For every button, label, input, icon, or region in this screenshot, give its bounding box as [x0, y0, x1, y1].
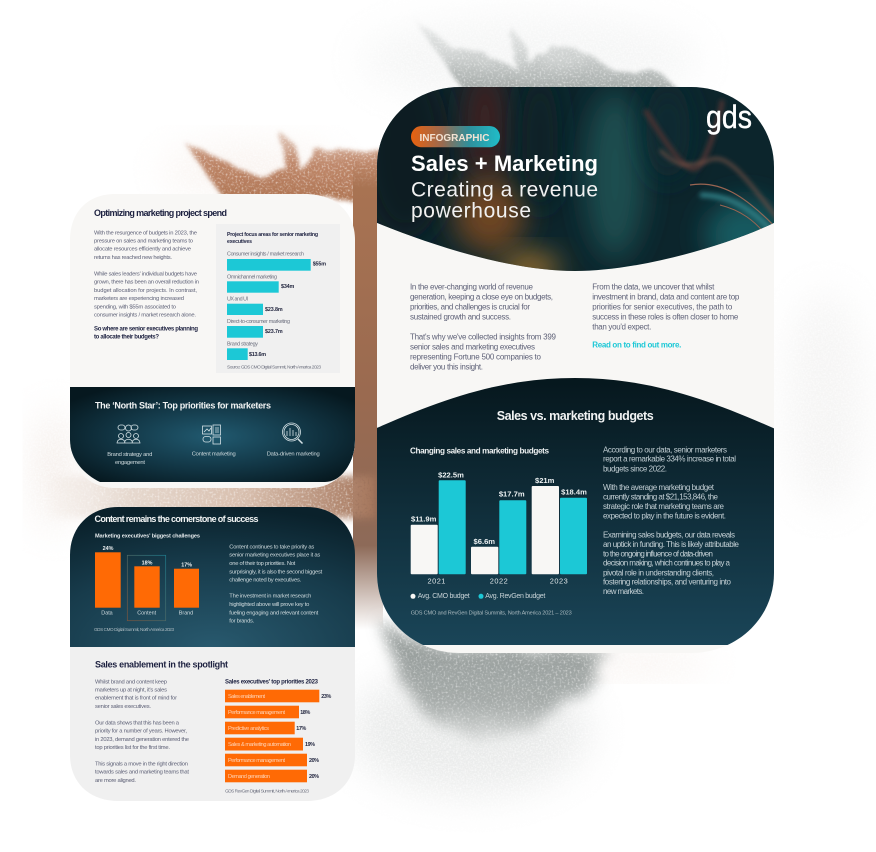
- bar chart: project focus areas: Omnichannel marketing: [227, 274, 277, 280]
- bar chart: sales executives top priorities: [225, 679, 332, 794]
- chart title: Changing sales and marketing budgets: [410, 447, 549, 456]
- text block: one of their top priorities. Not: [229, 561, 296, 567]
- bar chart: sales executives top priorities: Predictive analytics: [228, 726, 269, 732]
- text block: intro left column: sustained growth and success.: [410, 313, 511, 322]
- text block: budgets analysis: pivotal role in understanding clients,: [603, 568, 714, 577]
- bars 2022: $6.6m: [474, 537, 495, 546]
- icon labels: [107, 452, 320, 466]
- bar chart: sales executives top priorities: 18%: [300, 710, 311, 716]
- text block: consumer insights / market research alone.: [94, 312, 196, 318]
- bar chart: changing sales and marketing budgets: [410, 447, 587, 616]
- bars 2023: $21m: [535, 476, 555, 485]
- text block: intro left column: In the ever-changing world of revenue: [410, 283, 534, 292]
- text block: are more aligned.: [95, 778, 136, 784]
- heading: Sales enablement in the spotlight: [95, 659, 228, 669]
- text block: intro right column: investment in brand, data and content are top: [592, 293, 740, 302]
- bar chart: sales executives top priorities: Sales enablement: [228, 694, 265, 700]
- bar chart: sales executives top priorities: Performance management: [228, 758, 285, 764]
- heading: The ‘North Star’: Top priorities for marketers: [95, 401, 271, 411]
- text block: While sales leaders' individual budgets have: [94, 271, 197, 277]
- legend: [410, 593, 545, 600]
- panel: content remains the cornerstone: [70, 507, 355, 647]
- bar chart: project focus areas: [216, 224, 340, 373]
- text block: priority for a number of years. However,: [95, 729, 187, 735]
- heading: Content remains the cornerstone of success: [94, 514, 258, 524]
- bars 2021: [411, 470, 466, 586]
- text block: intro right column: priorities for senior executives, the path to: [592, 303, 733, 312]
- text block: intro right column: [592, 283, 740, 349]
- text block: So where are senior executives planning: [94, 327, 198, 333]
- bar chart: project focus areas: $23.8m: [265, 307, 283, 313]
- title: powerhouse: [411, 199, 531, 222]
- text block: challenge noted by executives.: [229, 577, 302, 583]
- text block: budgets analysis: currently standing at $21,153,846, the: [603, 492, 719, 501]
- bar chart: sales executives top priorities: 20%: [309, 758, 319, 764]
- text block: Our data shows that this has been a: [95, 720, 180, 726]
- text block: budgets analysis: budgets since 2022.: [603, 464, 667, 473]
- bar chart: sales executives top priorities: 23%: [321, 694, 332, 700]
- text block: spending, with $55m associated to: [94, 304, 176, 310]
- icon labels: Brand strategy and: [107, 452, 152, 458]
- text block: The investment in market research: [229, 594, 311, 600]
- text block: intro left column: [410, 283, 557, 372]
- bars 2022: 2022: [490, 577, 508, 586]
- bar chart: project focus areas: Brand strategy: [227, 342, 258, 348]
- bar chart: project focus areas: $55m: [313, 262, 326, 268]
- heading: Optimizing marketing project spend: [94, 208, 227, 218]
- text block: highlighted above will prove key to: [229, 602, 309, 608]
- text block: budgets analysis: an uptick in funding. This is likely attributable: [603, 540, 740, 549]
- panel: optimizing marketing project spend: [70, 194, 355, 488]
- icon: content marketing panels: [202, 425, 220, 444]
- text block: budgets analysis: According to our data, senior marketers: [603, 445, 727, 454]
- bar chart: sales executives top priorities: Demand generation: [228, 774, 270, 780]
- text block: intro right column: success in these roles is often closer to home: [592, 313, 739, 322]
- text block: budgets analysis: With the average marketing budget: [603, 483, 715, 492]
- bar chart: biggest challenges: 18%: [142, 560, 153, 566]
- bar chart: biggest challenges: Marketing executives' biggest challenges: [95, 534, 200, 540]
- pill label: infographic: INFOGRAPHIC: [420, 133, 490, 144]
- logo: gds: gds: [706, 99, 752, 135]
- bar chart: project focus areas: Source: GDS CMO Digital Summit, North America 2023: [227, 364, 321, 370]
- pill label: infographic: [411, 126, 500, 147]
- text block: intro right column: than you'd expect.: [592, 323, 651, 332]
- bars 2023: 2023: [550, 577, 568, 586]
- source note: GDS CMO and RevGen Digital Summits, North America 2021 – 2023: [411, 610, 572, 616]
- hero background image: [360, 60, 785, 645]
- bar chart: biggest challenges: 24%: [103, 546, 114, 552]
- text block: Whilst brand and content keep: [95, 679, 167, 685]
- text block: fueling engaging and relevant content: [229, 610, 319, 616]
- text block: surprisingly, it is also the second biggest: [229, 569, 323, 575]
- text block: for brands.: [229, 618, 255, 624]
- heading: sales vs marketing budgets: Sales vs. marketing budgets: [497, 409, 654, 423]
- text block: This signals a move in the right direction: [95, 762, 188, 768]
- text block: budgets analysis: expected to play in the future is evident.: [603, 511, 726, 520]
- bar chart: biggest challenges: Data: [101, 610, 113, 616]
- icon: people with speech bubbles: [117, 425, 140, 443]
- text block: budget allocation for projects. In contrast,: [94, 288, 197, 294]
- bars 2022: $17.7m: [499, 490, 525, 499]
- icon labels: engagement: [115, 460, 145, 466]
- bar chart: sales executives top priorities: GDS RevGen Digital Summit, North America 2023: [225, 789, 309, 794]
- title: [411, 151, 598, 222]
- text block: marketers up at night, it's sales: [95, 688, 167, 694]
- bar chart: project focus areas: Direct-to-consumer marketing: [227, 319, 290, 325]
- bar chart: sales executives top priorities: Performance management: [228, 710, 285, 716]
- icon: magnifier with chart: [282, 423, 302, 444]
- icon labels: Data-driven marketing: [267, 452, 320, 458]
- text block: enablement that is front of mind for: [95, 696, 177, 702]
- bars 2021: $11.9m: [411, 514, 437, 523]
- legend: Avg. RevGen budget: [485, 593, 545, 600]
- text block: intro right column: Read on to find out more.: [592, 340, 681, 349]
- text block: With the resurgence of budgets in 2023, the: [94, 230, 197, 236]
- text block: marketers are experiencing increased: [94, 296, 184, 302]
- text block: allocate resources efficiently and achieve: [94, 247, 191, 253]
- bar chart: project focus areas: $13.6m: [249, 352, 266, 358]
- text block: Content continues to take priority as: [229, 544, 314, 550]
- text block: intro left column: That's why we've collected insights from 399: [410, 333, 557, 342]
- text block: intro left column: generation, keeping a close eye on budgets,: [410, 293, 553, 302]
- bar chart: biggest challenges: Brand: [179, 610, 193, 616]
- bar chart: project focus areas: Project focus areas for senior marketing: [227, 232, 318, 238]
- text block: budgets analysis: report a remarkable 334% increase in total: [603, 455, 736, 464]
- bar chart: sales executives top priorities: 19%: [305, 742, 315, 748]
- bar chart: sales executives top priorities: Sales & marketing automation: [228, 742, 291, 748]
- bars 2022: [471, 490, 526, 586]
- panel: main infographic card: [377, 87, 774, 653]
- text block: returns has reached new heights.: [94, 255, 172, 261]
- title: Creating a revenue: [411, 179, 598, 202]
- text block: intro left column: senior sales and marketing executives: [410, 342, 535, 352]
- text block: to allocate their budgets?: [94, 335, 159, 341]
- bar chart: project focus areas: UX and UI: [227, 297, 248, 303]
- text block: senior marketing executives place it as: [229, 553, 320, 559]
- bars 2021: 2021: [427, 577, 446, 586]
- bar chart: sales executives top priorities: 20%: [309, 774, 319, 780]
- text block: [229, 544, 323, 624]
- bars 2023: $18.4m: [561, 487, 587, 496]
- icon labels: Content marketing: [192, 452, 236, 458]
- title: Sales + Marketing: [411, 151, 598, 176]
- text block: intro left column: representing Fortune 500 companies to: [410, 352, 542, 362]
- text block: grown, there has been an overall reduction in: [94, 280, 199, 286]
- text block: budgets analysis: strategic role that marketing teams are: [603, 502, 725, 511]
- text block: budgets analysis: decision making, which continues to play a: [603, 559, 731, 568]
- text block: in 2023, demand generation entered the: [95, 737, 189, 743]
- legend: Avg. CMO budget: [418, 593, 470, 600]
- text block: budgets analysis: fostering relationships, and venturing into: [603, 578, 732, 587]
- bar chart: project focus areas: Consumer insights / market research: [227, 252, 304, 258]
- text block: [94, 230, 199, 341]
- bars 2021: $22.5m: [438, 470, 464, 479]
- bar chart: sales executives top priorities: 17%: [296, 726, 307, 732]
- bar chart: biggest challenges: Content: [137, 610, 157, 616]
- text block: senior sales executives.: [95, 704, 151, 710]
- text block: intro right column: From the data, we uncover that whilst: [592, 283, 715, 292]
- bar chart: project focus areas: $34m: [281, 284, 295, 290]
- text block: budgets analysis: new markets.: [603, 587, 644, 596]
- panel: sales enablement in the spotlight: [70, 647, 355, 801]
- bar chart: project focus areas: executives: [227, 239, 252, 245]
- bar chart: biggest challenges: [94, 534, 200, 632]
- bar chart: biggest challenges: GDS CMO Digital Summit, North America 2023: [94, 627, 174, 632]
- text block: budgets analysis: [603, 445, 740, 596]
- bars 2023: [532, 476, 587, 586]
- text block: [95, 679, 189, 784]
- dark budgets section background: [370, 378, 780, 645]
- text block: top priorities list for the first time.: [95, 745, 170, 751]
- panel: the north star priorities: [70, 387, 355, 482]
- text block: intro left column: priorities, and challenges is crucial for: [410, 303, 530, 312]
- bar chart: sales executives top priorities: Sales executives' top priorities 2023: [225, 679, 319, 685]
- text block: pressure on sales and marketing teams to: [94, 239, 193, 245]
- text block: intro left column: deliver you this insight.: [410, 362, 483, 372]
- text block: budgets analysis: Examining sales budgets, our data reveals: [603, 530, 735, 539]
- bar chart: project focus areas: $23.7m: [265, 329, 283, 335]
- bar chart: biggest challenges: 17%: [181, 562, 192, 568]
- text block: budgets analysis: to the ongoing influence of data-driven: [603, 549, 713, 558]
- text block: towards sales and marketing teams that: [95, 770, 189, 776]
